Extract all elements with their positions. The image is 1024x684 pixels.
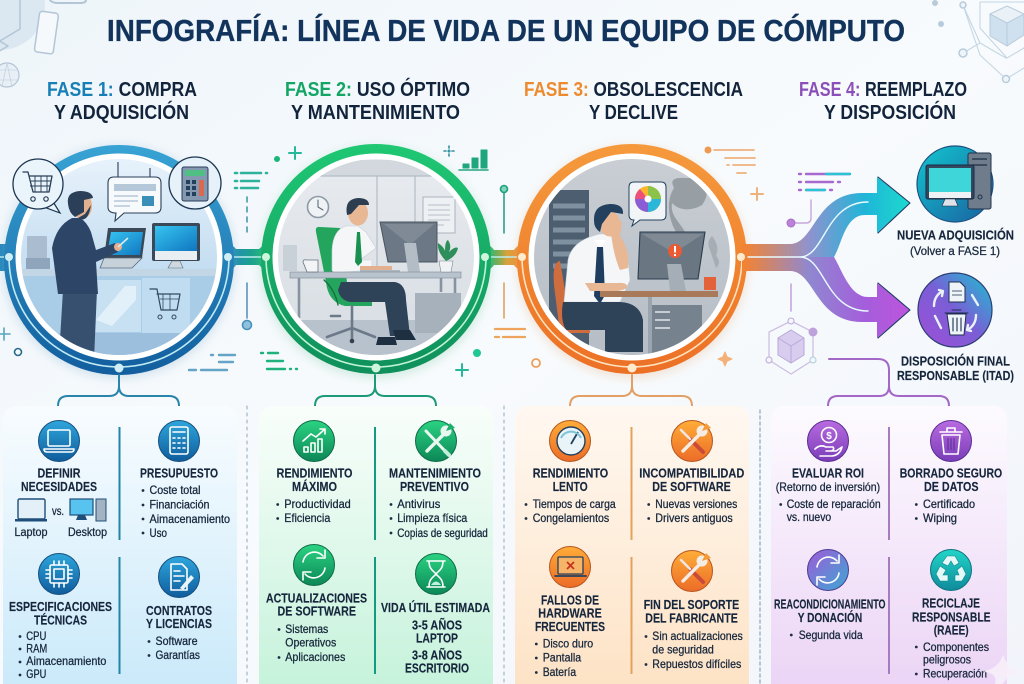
- heading: fase 2: Y MANTENIMIENTO: [291, 102, 460, 124]
- item: definir necesidades: Desktop: [68, 525, 107, 539]
- icon: gauge: [550, 420, 590, 462]
- icon: document: [158, 556, 200, 598]
- item: vida útil estimada: 3-5 AÑOS: [412, 618, 462, 632]
- item: fin del soporte: Repuestos difíciles: [652, 657, 741, 671]
- item: fin del soporte: [644, 597, 743, 671]
- item: fin del soporte: de seguridad: [652, 642, 714, 656]
- item: reciclaje responsable: Componentes: [923, 640, 989, 654]
- item: presupuesto: [140, 466, 230, 540]
- label: nueva adquisición: [897, 228, 1014, 258]
- decoration: top-right cube network: [932, 0, 1024, 82]
- icon: hourglass: [416, 554, 456, 594]
- scene: employee at desk: [283, 160, 462, 355]
- item: fin del soporte: FIN DEL SOPORTE: [644, 597, 739, 612]
- item: incompatibilidad de software: [639, 466, 744, 525]
- icon: tools end of support: [672, 550, 712, 592]
- item: rendimiento lento: [525, 466, 616, 525]
- item: especificaciones técnicas: TÉCNICAS: [34, 612, 87, 628]
- item: borrado seguro: DE DATOS: [924, 479, 979, 494]
- item: vida útil estimada: [381, 600, 490, 676]
- icon: recycle: [930, 550, 972, 590]
- icon: calculator: [158, 420, 200, 462]
- phase 1 circle: [3, 145, 235, 378]
- item: borrado seguro: BORRADO SEGURO: [900, 466, 1002, 480]
- item: contratos y licencias: [146, 603, 212, 662]
- item: definir necesidades: NECESIDADES: [21, 479, 97, 494]
- panel: fase 2: [259, 406, 493, 684]
- item: evaluar roi: (Retorno de inversión): [776, 480, 880, 494]
- item: rendimiento lento: LENTO: [553, 479, 588, 494]
- heading: fase 3: FASE 3: OBSOLESCENCIA: [524, 79, 743, 101]
- heading: fase 3: [524, 79, 743, 124]
- item: rendimiento máximo: Productividad: [284, 497, 351, 511]
- heading: fase 4: FASE 4: REEMPLAZO: [799, 79, 967, 101]
- item: definir necesidades: [14, 466, 107, 539]
- icon: wrench and screwdriver: [416, 420, 456, 462]
- item: rendimiento lento: Congelamientos: [533, 511, 609, 525]
- item: presupuesto: Financiación: [150, 498, 210, 512]
- icon: refresh arrows: [294, 544, 334, 586]
- icon: trash: [930, 420, 972, 462]
- item: rendimiento lento: Tiempos de carga: [533, 497, 616, 511]
- item: reciclaje responsable: (RAEE): [934, 622, 969, 638]
- item: especificaciones técnicas: [9, 599, 112, 681]
- item: reacondicionamiento y donación: Segunda vida: [799, 628, 863, 642]
- item: incompatibilidad de software: INCOMPATIBILIDAD: [639, 466, 744, 480]
- item: actualizaciones de software: DE SOFTWARE: [278, 604, 356, 618]
- item: especificaciones técnicas: RAM: [26, 642, 47, 656]
- heading: fase 4: [799, 79, 967, 124]
- item: vida útil estimada: ESCRITORIO: [405, 660, 469, 676]
- fork arrows: [737, 177, 910, 338]
- item: contratos y licencias: Software: [156, 634, 198, 648]
- item: evaluar roi: vs. nuevo: [787, 510, 831, 524]
- item: incompatibilidad de software: Drivers antiguos: [655, 511, 733, 525]
- item: reciclaje responsable: RECICLAJE: [922, 596, 980, 610]
- item: presupuesto: PRESUPUESTO: [140, 466, 218, 480]
- panel: fase 1: [3, 406, 237, 684]
- item: actualizaciones de software: Aplicaciones: [285, 650, 345, 664]
- item: mantenimiento preventivo: Antivirus: [397, 497, 440, 511]
- icon: laptop: [38, 420, 80, 462]
- icon: calculator bubble: [169, 157, 221, 209]
- item: actualizaciones de software: Sistemas: [285, 622, 328, 636]
- item: fallos de hardware frecuentes: FRECUENTES: [535, 619, 605, 634]
- panel: fase 3: [515, 406, 749, 684]
- item: presupuesto: Coste total: [150, 483, 200, 497]
- item: presupuesto: Uso: [150, 526, 167, 540]
- icon: growth chart: [294, 420, 334, 462]
- item: evaluar roi: [776, 466, 881, 524]
- panel separators: [247, 406, 760, 684]
- item: vida útil estimada: VIDA ÚTIL ESTIMADA: [381, 600, 490, 615]
- item: fallos de hardware frecuentes: Batería: [543, 665, 576, 679]
- item: reciclaje responsable: Recuperación: [923, 666, 987, 680]
- decoration: small marks around circles: [0, 146, 850, 376]
- heading: fase 2: [285, 77, 470, 124]
- timeline pipes between circles: [0, 244, 526, 271]
- item: reciclaje responsable: peligrosos: [923, 652, 971, 666]
- icon: refurbish arrows: [808, 550, 848, 590]
- item: vida útil estimada: LAPTOP: [416, 630, 458, 646]
- item: borrado seguro: Wiping: [923, 511, 957, 525]
- item: evaluar roi: EVALUAR ROI: [792, 466, 864, 480]
- item: mantenimiento preventivo: [389, 466, 488, 540]
- item: actualizaciones de software: ACTUALIZACIONES: [266, 590, 367, 606]
- item: fallos de hardware frecuentes: [535, 592, 605, 679]
- item: reciclaje responsable: [912, 596, 991, 680]
- connectors: circles to panels: [58, 359, 949, 410]
- scene: buyer in computer store: [20, 162, 220, 363]
- item: rendimiento máximo: RENDIMIENTO: [276, 466, 352, 480]
- phase 2 circle: [260, 144, 492, 378]
- arrow: to new acquisition: [742, 177, 910, 257]
- icon: product speech bubble: [108, 177, 161, 221]
- item: actualizaciones de software: Operativos: [285, 636, 336, 650]
- item: definir necesidades: Laptop: [14, 525, 48, 539]
- item: fallos de hardware frecuentes: Pantalla: [543, 650, 581, 664]
- icon: disposal cycle: [918, 273, 992, 347]
- heading: fase 1: FASE 1: COMPRA: [47, 79, 197, 101]
- item: borrado seguro: Certificado: [923, 497, 975, 511]
- item: especificaciones técnicas: ESPECIFICACIONES: [9, 599, 112, 614]
- icon: failed laptop: [550, 546, 590, 588]
- item: rendimiento máximo: [276, 466, 352, 525]
- item: borrado seguro: [900, 466, 1002, 525]
- title: INFOGRAFÍA: LÍNEA DE VIDA DE UN EQUIPO DE CÓMPUTO: [107, 12, 905, 48]
- label: nueva adquisición: (Volver a FASE 1): [910, 244, 1000, 258]
- heading: fase 3: Y DECLIVE: [589, 102, 678, 124]
- item: vida útil estimada: 3-8 AÑOS: [412, 648, 462, 662]
- heading: fase 1: [47, 79, 197, 124]
- icon: chip: [38, 554, 80, 594]
- item: reciclaje responsable: RESPONSABLE: [912, 610, 991, 624]
- item: contratos y licencias: CONTRATOS: [146, 603, 212, 618]
- item: contratos y licencias: Garantías: [156, 648, 200, 662]
- phase 3 circle: [516, 144, 748, 378]
- icon: cart bubble: [13, 159, 63, 213]
- panel: fase 4: [771, 406, 1007, 684]
- item: mantenimiento preventivo: PREVENTIVO: [400, 479, 469, 494]
- scene: frustrated user with failing computer: [549, 178, 719, 360]
- heading: fase 1: Y ADQUISICIÓN: [54, 100, 189, 124]
- item: rendimiento lento: RENDIMIENTO: [533, 466, 608, 480]
- item: contratos y licencias: Y LICENCIAS: [146, 616, 212, 631]
- item: fallos de hardware frecuentes: HARDWARE: [538, 606, 602, 620]
- icon: new acquisition computer: [917, 146, 993, 222]
- item: reacondicionamiento y donación: Y DONACIÓN: [798, 610, 862, 625]
- item: incompatibilidad de software: Nuevas versiones: [655, 497, 737, 511]
- heading: fase 2: FASE 2: USO ÓPTIMO: [285, 77, 470, 101]
- label: disposición final: [897, 354, 1014, 383]
- item: mantenimiento preventivo: MANTENIMIENTO: [389, 466, 481, 480]
- item: definir necesidades: DEFINIR: [38, 466, 81, 480]
- item: reacondicionamiento y donación: [774, 596, 886, 642]
- item: actualizaciones de software: [266, 590, 367, 664]
- decoration: corner sparkle: [982, 654, 1024, 684]
- item: mantenimiento preventivo: Copias de seguridad: [397, 526, 488, 540]
- item: especificaciones técnicas: GPU: [26, 667, 46, 681]
- icon: tools: [672, 420, 712, 462]
- item: evaluar roi: Coste de reparación: [787, 497, 881, 511]
- icon: purple cube network: [766, 318, 818, 374]
- item: rendimiento máximo: MÁXIMO: [292, 479, 337, 494]
- item: definir necesidades: vs.: [52, 504, 64, 518]
- item: especificaciones técnicas: CPU: [26, 629, 46, 643]
- decoration: top-left device outlines: [0, 0, 86, 87]
- item: fin del soporte: DEL FABRICANTE: [645, 610, 738, 626]
- item: incompatibilidad de software: DE SOFTWARE: [652, 479, 731, 494]
- item: fallos de hardware frecuentes: Disco duro: [543, 636, 593, 650]
- item: fin del soporte: Sin actualizaciones: [652, 629, 743, 643]
- item: reacondicionamiento y donación: REACONDICIONAMIENTO: [774, 596, 886, 612]
- item: presupuesto: Aimacenamiento: [150, 512, 230, 526]
- arrow: to responsible disposal: [742, 257, 910, 338]
- icon: money in hand: $: [826, 431, 832, 442]
- heading: fase 4: Y DISPOSICIÓN: [824, 100, 956, 124]
- item: especificaciones técnicas: Aimacenamiento: [26, 654, 107, 668]
- item: rendimiento máximo: Eficiencia: [284, 511, 331, 525]
- item: mantenimiento preventivo: Limpieza física: [397, 511, 468, 525]
- icon: money in hand: [808, 420, 848, 462]
- item: fallos de hardware frecuentes: FALLOS DE: [541, 592, 599, 608]
